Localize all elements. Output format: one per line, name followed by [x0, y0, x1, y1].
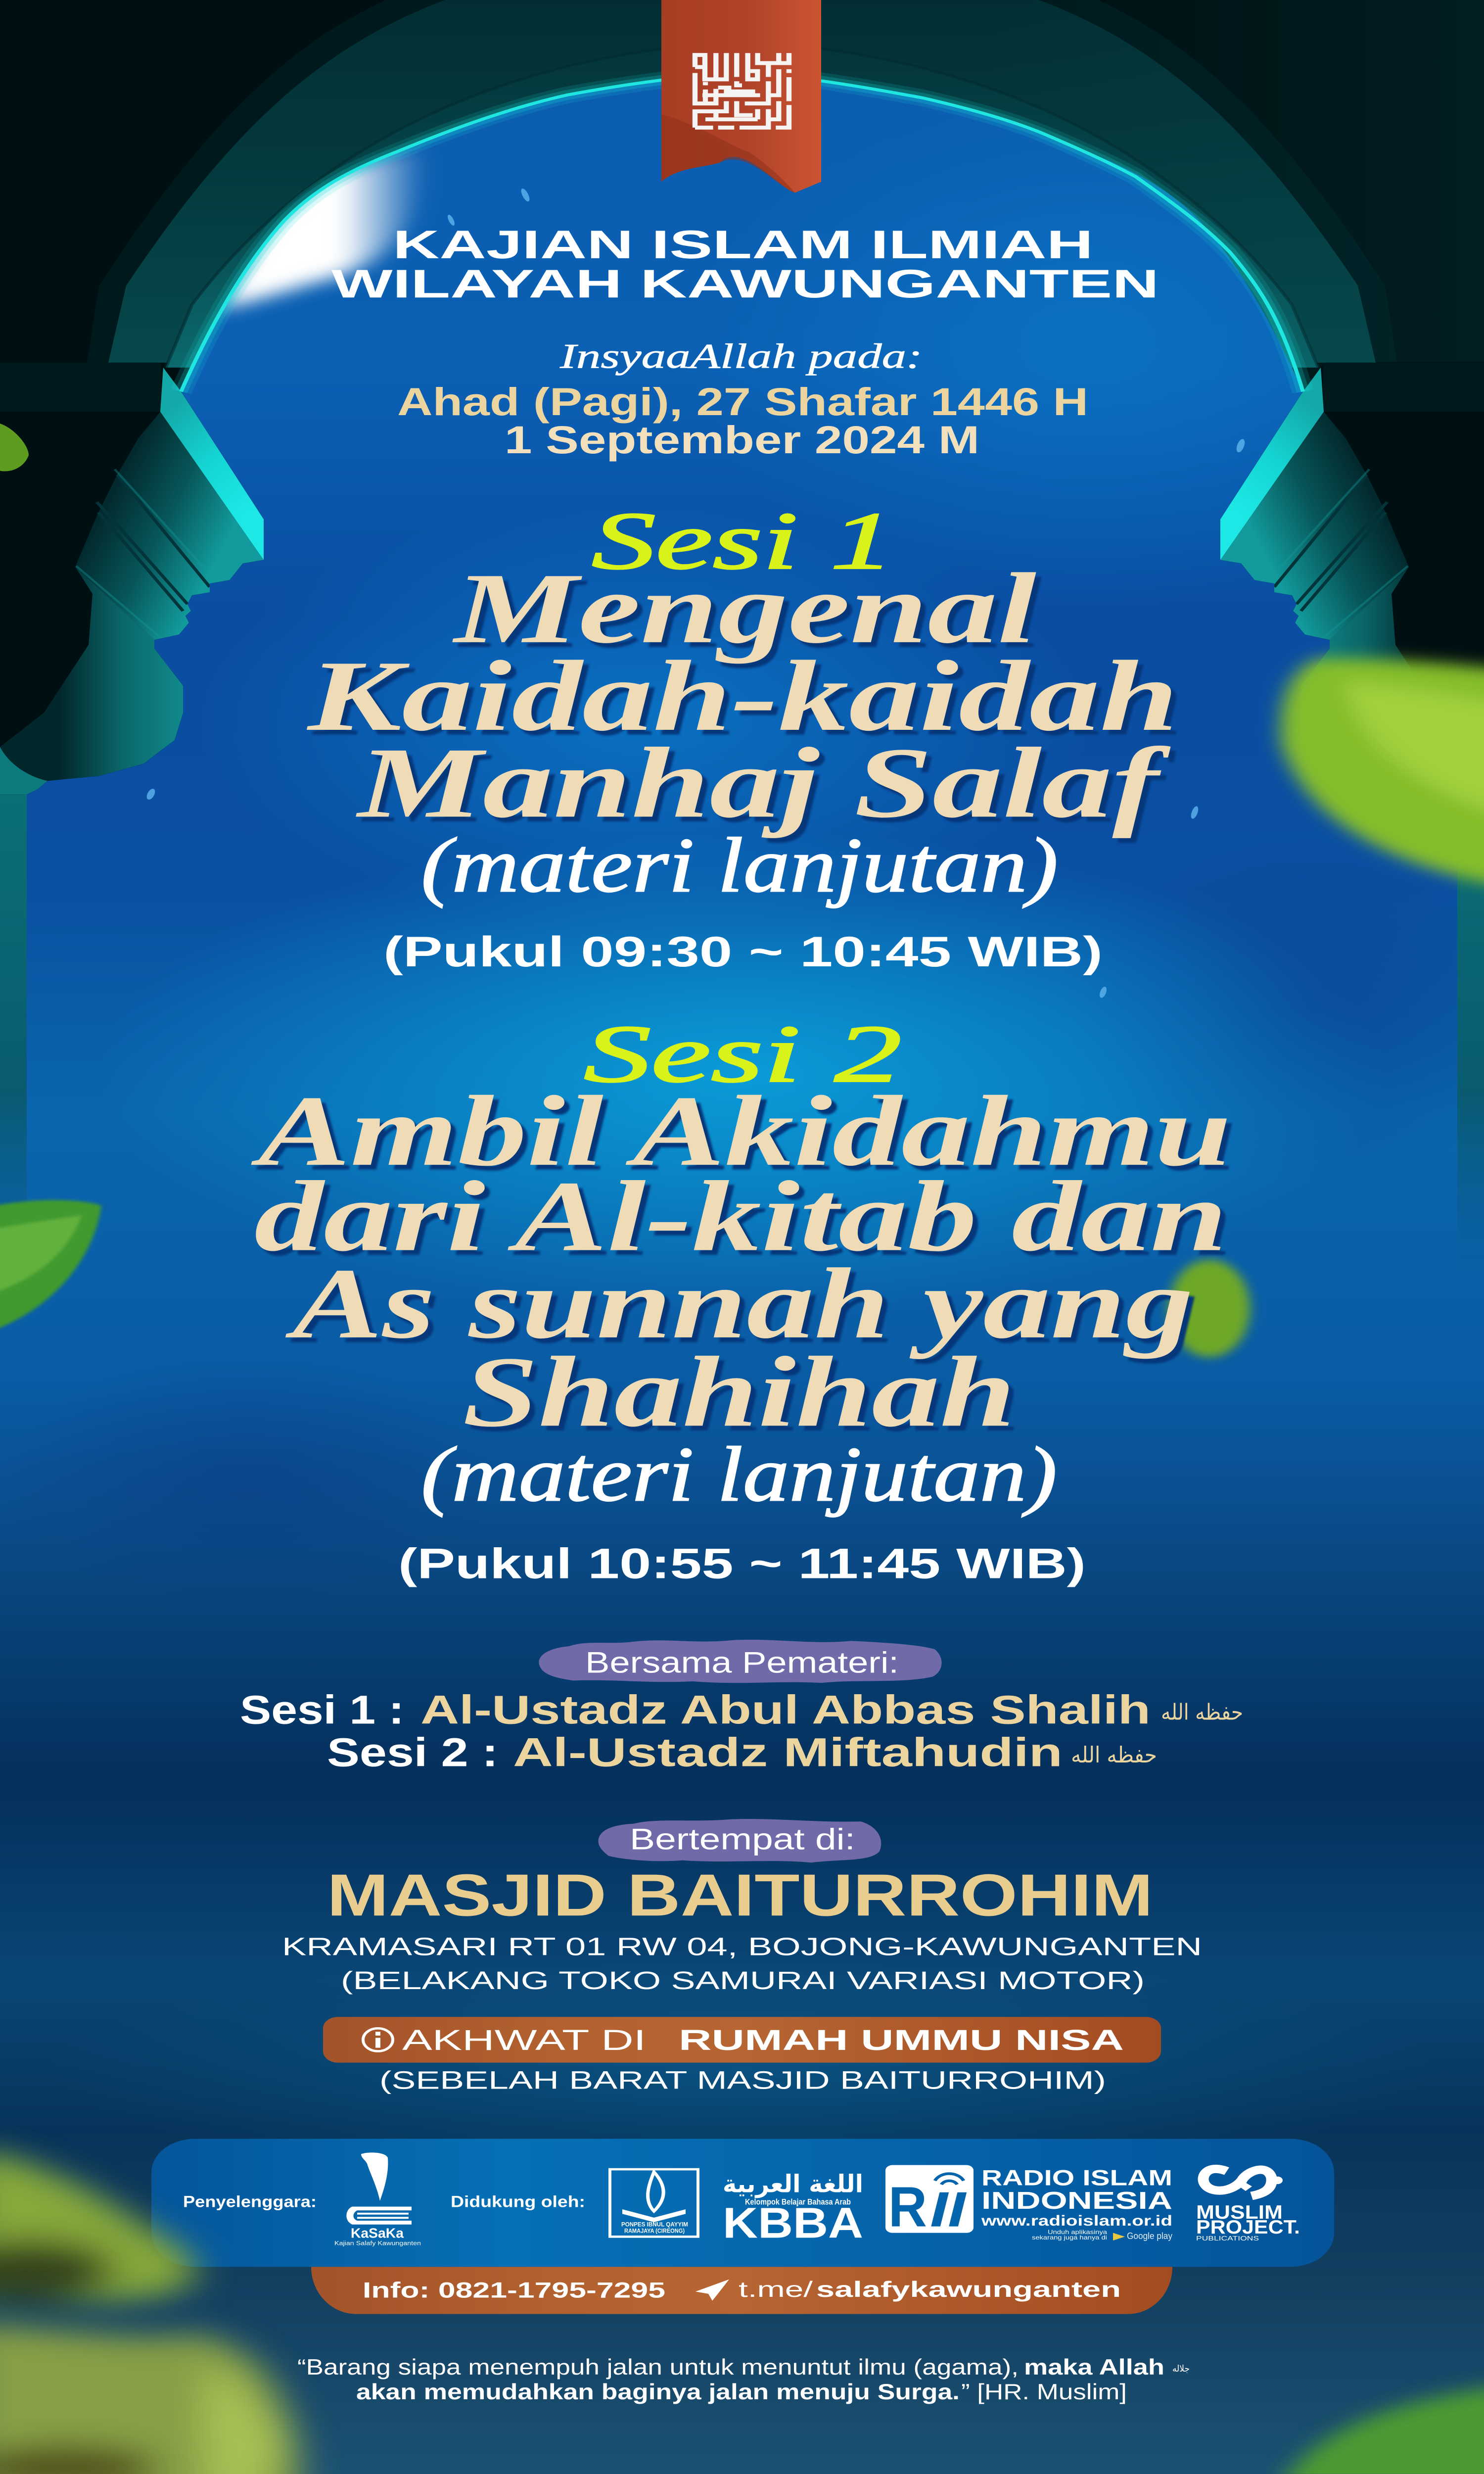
location: (BELAKANG TOKO SAMURAI VARIASI MOTOR) — [341, 1967, 1145, 1995]
icon: telegram — [696, 2280, 729, 2301]
location: Bertempat di: — [630, 1822, 855, 1856]
logo: Ponpes Ibnul Qayyim — [610, 2169, 698, 2236]
session 1: Manhaj Salaf — [355, 727, 1171, 839]
contact tab: t.me/ — [739, 2277, 813, 2302]
logo: KaSaKa — [334, 2152, 421, 2247]
session 1: Sesi 1 — [592, 496, 894, 586]
session 2: As sunnah yang — [285, 1248, 1193, 1360]
session 1: (Pukul 09:30 ~ 10:45 WIB) — [383, 928, 1103, 976]
logo: Radio Islam Indonesia: www.radioislam.or.id — [981, 2213, 1172, 2229]
quote — [297, 2355, 1190, 2404]
logo: Radio Islam Indonesia: sekarang juga hanya di — [1032, 2234, 1107, 2240]
right-side stone tint — [923, 0, 1484, 391]
akhwat note — [323, 2017, 1161, 2063]
logo: Radio Islam Indonesia: Google play — [1127, 2231, 1172, 2241]
leaf: bottom right blurred — [1274, 2377, 1484, 2474]
arch glow — [181, 74, 1303, 391]
speakers: حفظه الله — [1161, 1700, 1243, 1725]
session 2: dari Al-kitab dan — [254, 1160, 1227, 1272]
right column — [1457, 795, 1484, 1290]
header title: WILAYAH KAWUNGANTEN — [331, 261, 1159, 306]
session 2 — [251, 1009, 1231, 1587]
date block — [397, 337, 1088, 462]
brush label — [539, 1640, 942, 1683]
logo: Ponpes Ibnul Qayyim: PONPES IBNUL QAYYIM — [621, 2221, 688, 2228]
date block: Ahad (Pagi), 27 Shafar 1446 H — [397, 381, 1088, 424]
logo: Radio Islam Indonesia: RADIO ISLAM — [981, 2165, 1172, 2190]
location — [282, 1819, 1202, 1995]
contact tab: Info: 0821-1795-7295 — [363, 2278, 665, 2302]
sparkles — [145, 188, 1246, 999]
quote: maka Allah — [1024, 2355, 1164, 2379]
header title — [331, 222, 1159, 306]
header title: KAJIAN ISLAM ILMIAH — [393, 222, 1093, 267]
akhwat note: RUMAH UMMU NISA — [679, 2024, 1124, 2056]
sponsor panel: Didukung oleh: — [451, 2192, 585, 2210]
leaf: top left — [0, 424, 29, 471]
left column — [0, 795, 27, 1290]
ribbon — [661, 0, 821, 193]
date block: InsyaaAllah pada: — [559, 337, 923, 376]
logo: Radio Islam Indonesia: R — [888, 2175, 927, 2239]
session 1: (materi lanjutan) — [421, 822, 1058, 908]
session 1 — [307, 496, 1178, 976]
arch stone: right half — [821, 0, 1484, 685]
logo: Muslim Project: PROJECT. — [1196, 2217, 1300, 2238]
contact tab: salafykawunganten — [816, 2277, 1121, 2302]
session 2: Ambil Akidahmu — [251, 1075, 1231, 1187]
brush label — [599, 1819, 881, 1862]
quote: “Barang siapa menempuh jalan untuk menuntut ilmu (agama), — [297, 2355, 1019, 2379]
logo: Muslim Project — [1196, 2169, 1300, 2242]
logo: Muslim Project: PUBLICATIONS — [1196, 2235, 1259, 2242]
logo: KBBA: KBBA — [723, 2199, 863, 2247]
session 2: Shahihah — [463, 1336, 1016, 1448]
speakers: Sesi 2 : — [327, 1730, 498, 1775]
logo: Muslim Project: MUSLIM — [1196, 2202, 1283, 2223]
logo: Radio Islam Indonesia: II — [930, 2182, 967, 2237]
session 2: (materi lanjutan) — [421, 1431, 1057, 1518]
speakers — [240, 1640, 1243, 1775]
logo: Radio Islam Indonesia: Unduh aplikasinya — [1048, 2229, 1108, 2236]
sponsor panel: Penyelenggara: — [183, 2192, 317, 2210]
logo: KaSaKa: KaSaKa — [351, 2226, 404, 2241]
logo: Ponpes Ibnul Qayyim: RAMAJAYA (CIREONG) — [624, 2228, 685, 2234]
sponsor panel — [151, 2139, 1334, 2267]
kufi calligraphy — [695, 53, 789, 128]
akhwat note: AKHWAT DI — [402, 2024, 646, 2056]
speakers: Al-Ustadz Miftahudin — [513, 1730, 1063, 1775]
quote: akan memudahkan baginya jalan menuju Surga. — [356, 2379, 960, 2404]
session 2: (Pukul 10:55 ~ 11:45 WIB) — [398, 1540, 1086, 1587]
logo: KaSaKa: Kajian Salafy Kawunganten — [334, 2240, 421, 2247]
location: KRAMASARI RT 01 RW 04, BOJONG-KAWUNGANTEN — [282, 1933, 1202, 1961]
logo: KBBA: اللغة العربية — [723, 2170, 863, 2198]
logo: Radio Islam Indonesia: INDONESIA — [981, 2187, 1172, 2214]
arch stone: left half — [0, 0, 661, 795]
speakers: Al-Ustadz Abul Abbas Shalih — [420, 1687, 1151, 1733]
session 1: Mengenal — [452, 553, 1036, 665]
quote: ” [HR. Muslim] — [961, 2379, 1127, 2404]
logo: KBBA: Kelompok Belajar Bahasa Arab — [745, 2197, 851, 2207]
logo: Radio Islam Indonesia — [885, 2165, 1172, 2241]
leaf: left middle — [0, 1197, 104, 1330]
date block: 1 September 2024 M — [505, 419, 979, 462]
quote: جلاله — [1172, 2364, 1190, 2374]
moon glow — [220, 148, 428, 321]
leaf: centre blurred — [1159, 1254, 1259, 1364]
akhwat address: (SEBELAH BARAT MASJID BAITURROHIM) — [379, 2067, 1106, 2094]
leaf: right blurred — [1265, 647, 1484, 893]
session 1: Kaidah-kaidah — [307, 640, 1178, 752]
icon: info — [363, 2028, 393, 2051]
logo: KBBA — [723, 2170, 863, 2247]
contact tab — [311, 2267, 1172, 2314]
arch stone and capitals — [0, 0, 1484, 1241]
leaf: bottom left blurred — [0, 2136, 325, 2474]
speakers: Bersama Pemateri: — [585, 1646, 899, 1679]
session 2: Sesi 2 — [584, 1009, 902, 1099]
speakers: حفظه الله — [1071, 1742, 1157, 1768]
speakers: Sesi 1 : — [240, 1687, 404, 1733]
location: MASJID BAITURROHIM — [327, 1862, 1153, 1928]
